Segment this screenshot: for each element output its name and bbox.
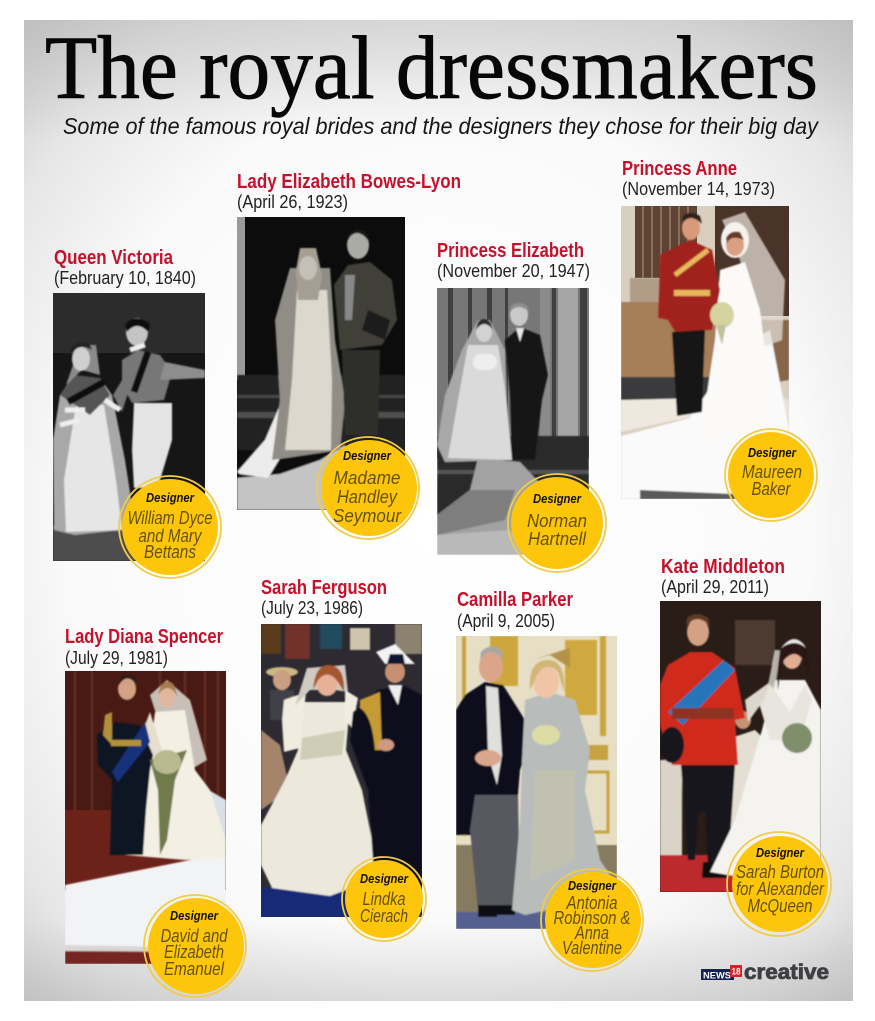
badge: designer Lindka Cierach [342,857,426,941]
heading: Lady Elizabeth Bowes-Lyon [237,171,461,212]
heading: Queen Victoria: Queen Victoria [54,247,174,269]
badge: designer Sarah Burton for Alexander McQueen: Sarah Burton [736,861,824,882]
photo: Princess Elizabeth wedding [437,288,589,555]
heading: Camilla Parker: Camilla Parker [457,589,573,611]
badge: designer Antonia Robinson and Anna Valentine [541,869,643,971]
heading: Lady Diana Spencer [65,626,223,668]
heading: Princess Elizabeth: Princess Elizabeth [437,240,584,262]
heading: Princess Anne: (November 14, 1973) [622,179,775,199]
badge: designer William Dyce and Mary Bettans: Bettans [144,541,196,562]
heading: Kate Middleton: (April 29, 2011) [661,577,769,597]
heading: Sarah Ferguson: (July 23, 1986) [261,598,363,618]
badge: designer Maureen Baker: Designer [748,445,797,460]
panel: Princess Elizabeth [437,240,606,572]
badge: designer Antonia Robinson and Anna Valentine: Robinson & [554,907,630,928]
heading: Princess Elizabeth [437,240,590,281]
panel: Sarah Ferguson [261,577,426,941]
badge: designer Lindka Cierach: Lindka [362,888,406,909]
heading: Camilla Parker [457,589,573,631]
badge: designer William Dyce and Mary Bettans: William Dyce [128,507,212,528]
badge: designer Norman Hartnell: Designer [533,491,582,506]
badge: designer Lindka Cierach: Cierach [360,905,408,926]
heading: Queen Victoria: (February 10, 1840) [54,268,196,288]
heading: Lady Elizabeth Bowes-Lyon: Lady Elizabeth Bowes-Lyon [237,171,461,193]
title: The royal dressmakers [45,19,818,118]
badge: designer Maureen Baker: Maureen [742,461,802,482]
subtitle: Some of the famous royal brides and the designers they chose for their big day [63,113,819,139]
badge: designer David and Elizabeth Emanuel: Elizabeth [164,941,224,962]
photo: Kate Middleton wedding [660,601,821,892]
badge: designer Antonia Robinson and Anna Valentine: Designer [568,878,617,893]
panel: Lady Elizabeth Bowes-Lyon [237,171,461,539]
badge: designer David and Elizabeth Emanuel: Emanuel [164,958,225,979]
heading: Kate Middleton: Kate Middleton [661,556,785,578]
heading: Camilla Parker: (April 9, 2005) [457,611,555,631]
logo: News18 Creative: NEWS [703,970,731,982]
heading: Sarah Ferguson [261,577,387,618]
panel: Princess Anne [621,158,817,521]
badge: designer Madame Handley Seymour: Designer [343,448,392,463]
photo: Princess Anne wedding [621,206,789,499]
badge: designer Norman Hartnell: Hartnell [528,528,587,549]
badge: designer Antonia Robinson and Anna Valentine: Anna [574,922,609,943]
badge: designer David and Elizabeth Emanuel [144,895,246,997]
badge: designer Madame Handley Seymour: Seymour [333,505,402,526]
badge: designer Madame Handley Seymour [317,437,419,539]
badge: designer William Dyce and Mary Bettans [119,476,221,578]
badge: designer Maureen Baker: Baker [752,478,791,499]
heading: Kate Middleton [661,556,785,597]
panel: Lady Diana Spencer [65,626,246,997]
heading: Lady Diana Spencer: (July 29, 1981) [65,648,168,668]
photo: Queen Victoria wedding engraving [53,293,205,561]
logo: News18 Creative [701,961,829,984]
photo: Lady Elizabeth Bowes-Lyon wedding [237,217,405,510]
badge: designer David and Elizabeth Emanuel: Designer [170,908,219,923]
badge: designer William Dyce and Mary Bettans: Designer [146,490,195,505]
panel: Kate Middleton [660,556,831,936]
badge: designer Lindka Cierach: Designer [360,871,409,886]
heading: Queen Victoria [54,247,196,288]
heading: Princess Anne: Princess Anne [622,158,737,180]
photo: Lady Diana Spencer wedding [65,671,226,964]
logo: News18 Creative: creative [744,961,829,984]
badge: designer Sarah Burton for Alexander McQueen: McQueen [748,895,812,916]
logo: News18 Creative: 18 [732,966,740,976]
badge: designer Antonia Robinson and Anna Valentine: Antonia [566,892,618,913]
badge: designer Norman Hartnell: Norman [527,510,587,531]
badge: designer Madame Handley Seymour: Handley [337,486,399,507]
badge: designer Sarah Burton for Alexander McQueen: for Alexander [736,878,825,899]
badge: designer Sarah Burton for Alexander McQueen: Designer [756,845,805,860]
heading: Princess Elizabeth: (November 20, 1947) [437,261,590,281]
photo: Sarah Ferguson wedding [261,624,422,917]
heading: Lady Elizabeth Bowes-Lyon: (April 26, 1923) [237,192,348,212]
badge: designer Madame Handley Seymour: Madame [334,467,400,488]
badge: designer Sarah Burton for Alexander McQueen [727,832,831,936]
badge: designer William Dyce and Mary Bettans: and Mary [138,525,203,546]
heading: Sarah Ferguson: Sarah Ferguson [261,577,387,599]
badge: designer David and Elizabeth Emanuel: David and [160,925,228,946]
heading: Princess Anne [622,158,775,199]
badge: designer Maureen Baker [725,429,817,521]
badge: designer Norman Hartnell [508,474,606,572]
panel: Camilla Parker [456,589,643,971]
badge: designer Antonia Robinson and Anna Valentine: Valentine [562,937,622,958]
heading: Lady Diana Spencer: Lady Diana Spencer [65,626,223,648]
photo: Camilla Parker wedding [456,636,617,929]
panel: Queen Victoria [53,247,221,578]
